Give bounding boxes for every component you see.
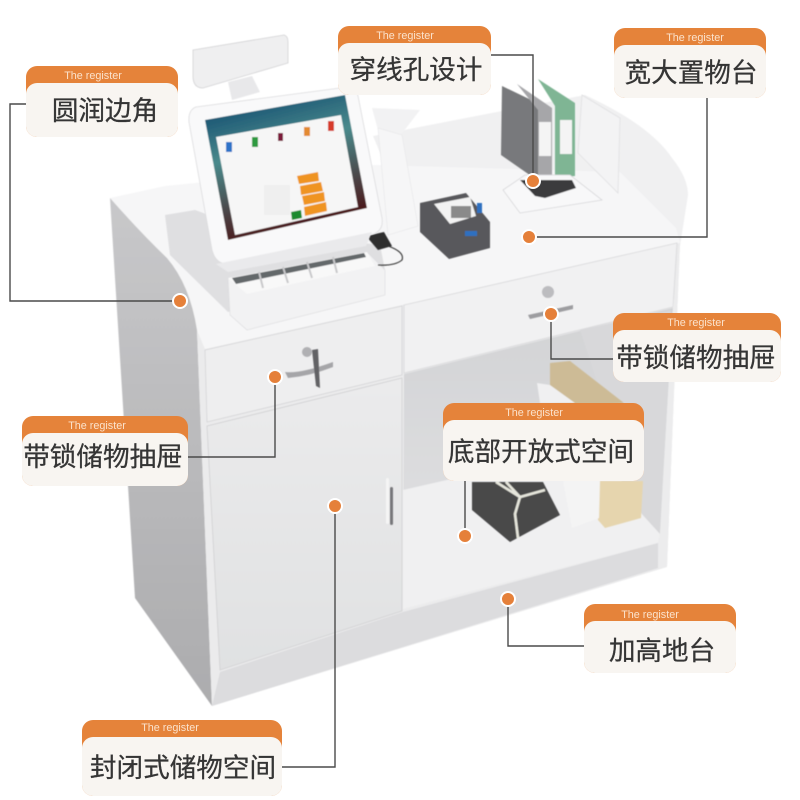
open compartment — [403, 308, 673, 608]
callout: rounded corners: 圆润边角 — [52, 96, 158, 126]
callout: lockable drawer right — [613, 313, 781, 382]
top surface — [110, 165, 680, 349]
right side edge — [658, 243, 680, 568]
callout: closed storage: The register — [141, 722, 199, 734]
door — [207, 378, 402, 670]
counter cabinet — [110, 95, 688, 706]
callout: lockable drawer right: 带锁储物抽屉 — [616, 343, 776, 373]
shopping bags — [537, 361, 643, 528]
keys and handles — [285, 286, 573, 525]
callout: lockable drawer left — [22, 416, 188, 486]
callout: open bottom space — [443, 403, 644, 481]
marker dots — [173, 174, 558, 606]
callout: open bottom space: The register — [505, 407, 563, 419]
left drawer — [205, 306, 402, 422]
connector lines — [10, 55, 707, 767]
body front — [197, 243, 680, 706]
screen — [205, 95, 367, 240]
receipt printer — [420, 193, 490, 259]
callout: wide shelf: 宽大置物台 — [625, 58, 757, 88]
app icons — [226, 121, 334, 152]
gift box — [472, 482, 560, 542]
callout: lockable drawer left: 带锁储物抽屉 — [23, 442, 183, 472]
callout: rounded corners: The register — [64, 70, 122, 82]
touch screen terminal — [189, 88, 382, 272]
callout: cable hole design: The register — [376, 30, 434, 42]
callout: raised plinth: 加高地台 — [609, 636, 715, 666]
rear small display and cable — [366, 108, 420, 265]
plinth — [212, 543, 658, 706]
callout: cable hole design — [338, 26, 491, 95]
terminal stand — [216, 232, 372, 272]
callout: raised plinth — [584, 604, 736, 673]
callout: closed storage: 封闭式储物空间 — [90, 753, 276, 783]
callout: wide shelf — [614, 28, 766, 98]
callout: lockable drawer right: The register — [667, 317, 725, 329]
back binders and rack — [501, 79, 620, 213]
drawer housing — [165, 210, 385, 312]
left side panel — [110, 198, 212, 706]
callout: raised plinth: The register — [621, 609, 679, 621]
keypad buttons — [264, 172, 327, 220]
callout: open bottom space: 底部开放式空间 — [448, 437, 634, 467]
cash drawer — [165, 210, 385, 330]
right drawer — [404, 243, 677, 373]
customer display — [193, 35, 288, 100]
open compartment floor — [403, 445, 660, 609]
open tray — [228, 252, 385, 330]
callout: closed storage — [82, 720, 282, 796]
back panel — [373, 95, 688, 246]
callout: rounded corners — [26, 66, 178, 137]
callout: cable hole design: 穿线孔设计 — [350, 55, 482, 85]
callout: lockable drawer left: The register — [68, 420, 126, 432]
callout: wide shelf: The register — [666, 32, 724, 44]
